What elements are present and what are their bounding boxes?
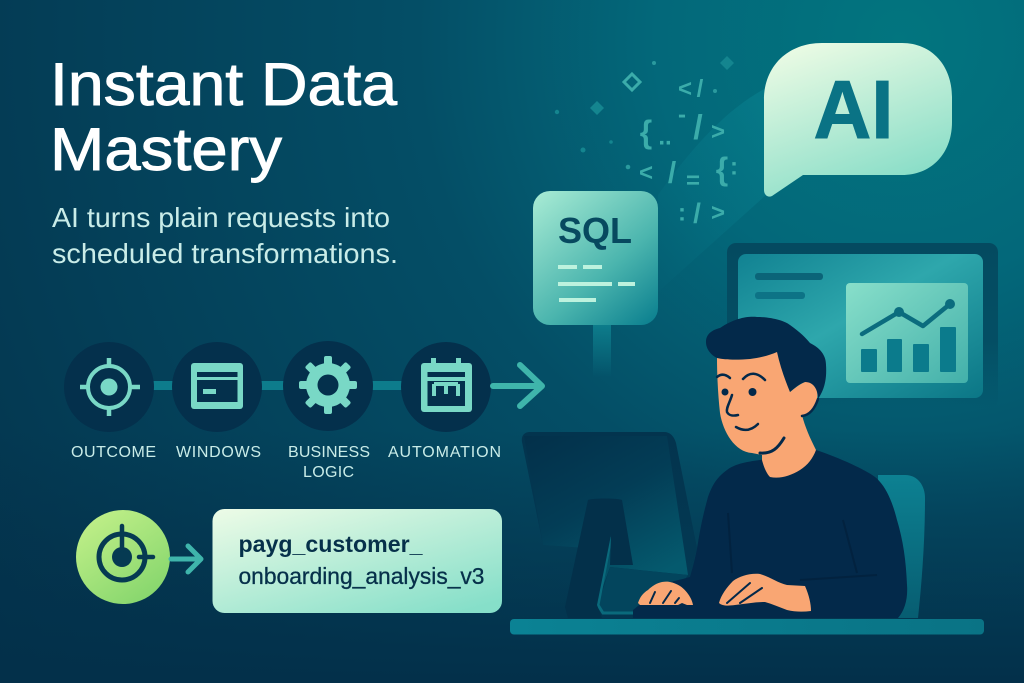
step labels: WINDOWS — [176, 444, 261, 461]
connectors — [150, 381, 410, 390]
computer monitor — [522, 432, 697, 618]
monitor stand highlight — [598, 537, 640, 613]
title: Mastery — [50, 116, 282, 183]
AI speech bubble: AI — [814, 63, 894, 156]
code symbols: : — [730, 154, 738, 180]
code symbols: { — [640, 114, 652, 150]
output table name card — [212, 509, 502, 613]
code symbols: > — [711, 118, 725, 146]
code symbols — [555, 56, 738, 228]
icon: green target — [76, 510, 170, 604]
code symbols: .. — [658, 124, 672, 150]
step labels: AUTOMATION — [388, 444, 501, 461]
desk — [510, 619, 984, 634]
output table name card: onboarding_analysis_v3 — [238, 563, 484, 589]
code symbols: / — [693, 198, 701, 228]
output table name card: payg_customer_ — [238, 531, 423, 557]
step labels: BUSINESS — [288, 444, 370, 461]
hair — [706, 317, 826, 399]
subtitle: AI turns plain requests into — [52, 202, 390, 233]
code symbols: < — [639, 160, 653, 186]
monitor screen — [524, 436, 688, 600]
icon: automation calendar — [401, 342, 491, 432]
code symbols: : — [678, 200, 686, 226]
sweater folds — [728, 513, 877, 580]
code symbols: / — [693, 109, 703, 147]
code symbols: = — [686, 168, 700, 194]
process flow — [64, 341, 542, 481]
small arrow — [171, 546, 201, 572]
monitor base plate — [598, 567, 688, 613]
icon: outcome target — [64, 342, 154, 432]
sweater — [633, 450, 907, 618]
left hand — [638, 582, 693, 605]
code symbols: < — [678, 76, 692, 102]
light beam from SQL card to AI bubble — [658, 88, 766, 292]
code symbols: - — [678, 102, 686, 128]
step labels: OUTCOME — [71, 444, 156, 461]
facial features — [717, 374, 818, 453]
monitor stand — [565, 498, 633, 618]
icon: windows — [172, 342, 262, 432]
code symbols: / — [697, 76, 704, 102]
subtitle: scheduled transformations. — [52, 238, 398, 269]
SQL post — [593, 325, 611, 377]
chart card — [846, 283, 968, 383]
AI speech bubble — [764, 43, 952, 197]
monitor body and bezel — [522, 432, 697, 600]
arrow — [493, 365, 542, 406]
icon: diamonds and dots — [555, 56, 734, 169]
code symbols: / — [668, 156, 677, 190]
title — [50, 51, 398, 183]
person — [633, 317, 907, 618]
chair — [878, 475, 925, 618]
face and neck — [717, 345, 817, 478]
SQL card: SQL — [558, 210, 632, 251]
SQL card — [533, 191, 658, 325]
subtitle — [52, 202, 398, 269]
right hand — [719, 574, 811, 612]
dashboard screen — [727, 243, 998, 408]
code symbols: { — [716, 151, 728, 187]
title: Instant Data — [50, 51, 398, 118]
step labels: LOGIC — [303, 464, 354, 481]
icon: business logic gear — [283, 341, 373, 431]
step labels — [71, 444, 501, 481]
code symbols: > — [711, 200, 725, 226]
